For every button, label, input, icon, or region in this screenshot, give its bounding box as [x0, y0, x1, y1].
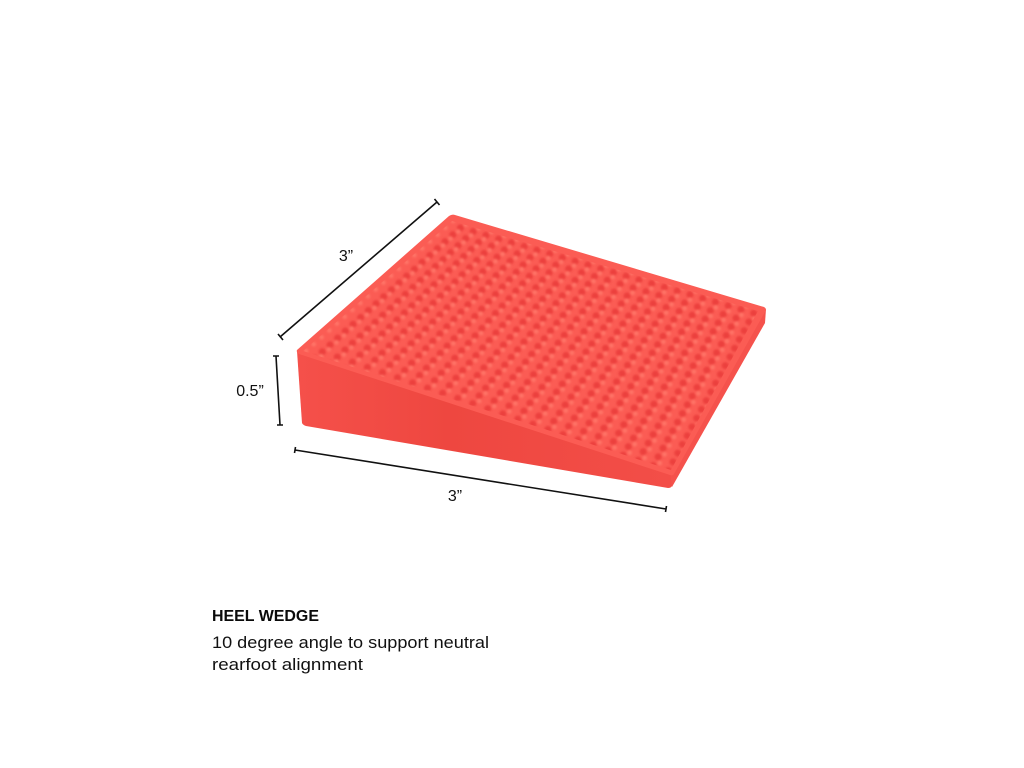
dimension: width 3 inch: [294, 447, 666, 512]
label: height: 0.5”: [236, 383, 264, 400]
dimension: depth 3 inch: [278, 199, 440, 340]
dimension: height 0.5 inch: [273, 356, 283, 425]
label: depth: 3”: [339, 248, 353, 265]
description: 10 degree angle to support neutral: [212, 634, 489, 652]
description: rearfoot alignment: [212, 656, 363, 674]
infographic: [213, 198, 766, 674]
heel wedge product: [297, 215, 766, 488]
stud pits: [307, 226, 760, 482]
wedge side face: [297, 351, 674, 488]
heading: HEEL WEDGE: [212, 608, 319, 625]
wedge textured top face: [297, 215, 766, 482]
wedge right edge: [670, 309, 766, 487]
stud tops: [306, 221, 759, 477]
description: [212, 634, 489, 674]
stud pits and highlights: [306, 221, 760, 482]
label: width: 3”: [448, 488, 462, 505]
